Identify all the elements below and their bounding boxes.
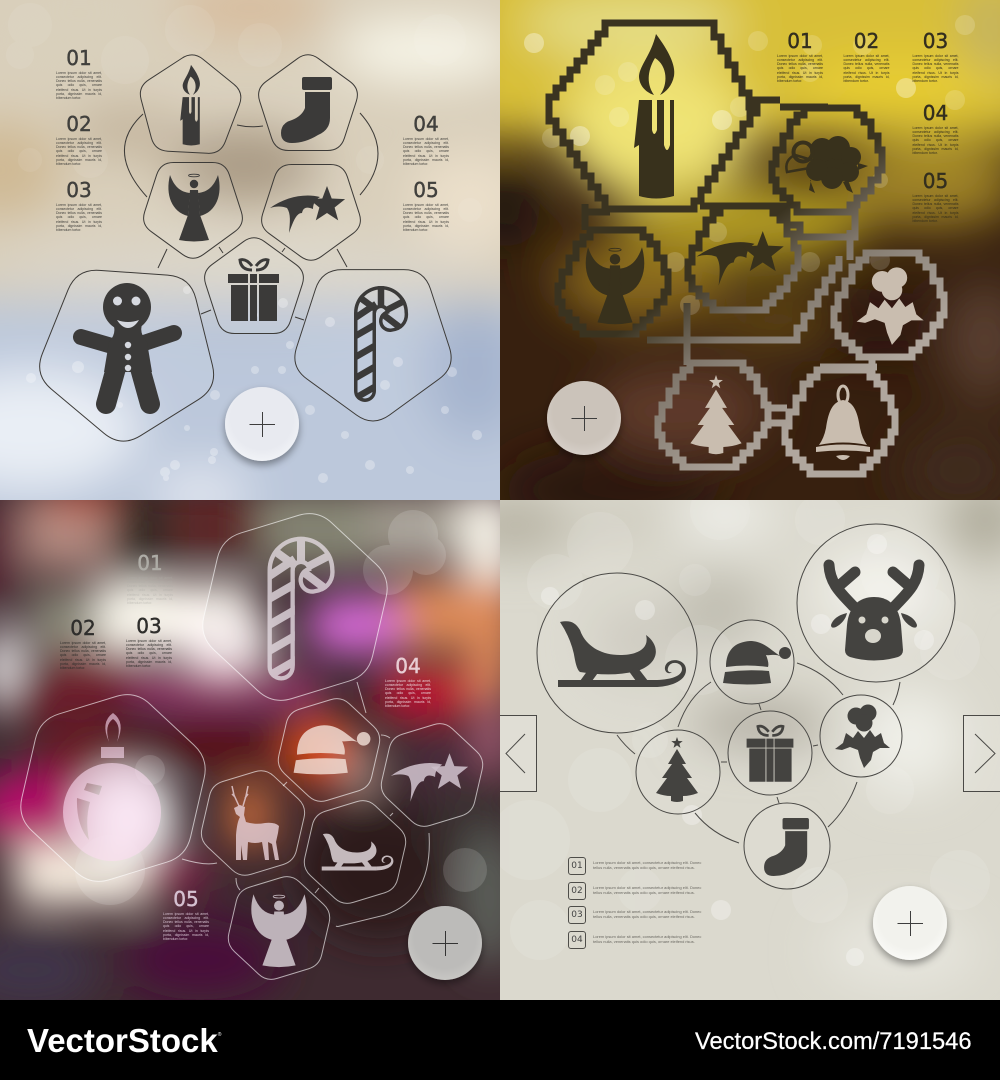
pentagon frames [35, 52, 451, 447]
text block 05: bibendum tortor. [403, 228, 428, 232]
text block 02: consectetur adipiscing elit. [56, 141, 102, 145]
connector lines [182, 682, 429, 926]
text block 04: Lorem ipsum dolor sit amet, [912, 126, 958, 130]
text block 02: Lorem ipsum dolor sit amet, [60, 641, 106, 645]
text block 03: Donec tellus nulla, venenatis [56, 211, 102, 215]
icon: gift box [747, 726, 793, 781]
text block 01: porta, dignissim mauris id, [127, 597, 173, 601]
text block 02: Donec tellus nulla, venenatis [56, 145, 102, 149]
list row 04: tellus nulla, venenatis quis odio quis, ornare eleifend risus. [593, 939, 695, 944]
text block 03: 03 [66, 178, 92, 202]
text block 05: eleifend risus. Ut in turpis [403, 220, 449, 224]
watermark url: VectorStock.com/7191546 [695, 1029, 972, 1055]
text block 03 [56, 178, 102, 232]
icon: candle [180, 65, 200, 145]
text block 02: Lorem ipsum dolor sit amet, [844, 54, 890, 58]
text block 04: consectetur adipiscing elit. [912, 130, 958, 134]
text block 03 [126, 614, 172, 668]
text block 05: quis odio quis, ornare [912, 206, 958, 210]
icon: bauble [63, 713, 161, 861]
text block 01 [777, 29, 823, 83]
text block 05: eleifend risus. Ut in turpis [163, 929, 209, 933]
text block 02 [56, 112, 102, 166]
icon: sleigh [558, 621, 686, 687]
text block 03: consectetur adipiscing elit. [126, 643, 172, 647]
icon: reindeer head [829, 565, 919, 660]
text block 01: consectetur adipiscing elit. [56, 75, 102, 79]
text block 03: bibendum tortor. [56, 228, 81, 232]
list row 01: tellus nulla, venenatis quis odio quis, ornare eleifend risus. [593, 865, 695, 870]
text block 03: consectetur adipiscing elit. [912, 58, 958, 62]
text block 02: 02 [854, 29, 879, 53]
text block 02 [60, 616, 106, 670]
text block 04: Lorem ipsum dolor sit amet, [385, 679, 431, 683]
icon: candy cane [250, 517, 349, 690]
icon: stocking [764, 818, 809, 876]
text block 05: porta, dignissim mauris id, [163, 933, 209, 937]
text block 02: eleifend risus. Ut in turpis [60, 658, 106, 662]
icon: holly [835, 704, 890, 768]
panel: pentagon infographic on beige and blue background [0, 0, 500, 500]
text block 02: porta, dignissim mauris id, [844, 75, 890, 79]
text block 05: bibendum tortor. [163, 937, 188, 941]
text block 04 [385, 654, 431, 708]
text block 02: Lorem ipsum dolor sit amet, [56, 137, 102, 141]
list row 02: tellus nulla, venenatis quis odio quis, ornare eleifend risus. [593, 890, 695, 895]
text block 01: bibendum tortor. [56, 96, 81, 100]
text block 01: porta, dignissim mauris id, [56, 92, 102, 96]
text block 04: consectetur adipiscing elit. [385, 683, 431, 687]
text block 04: 04 [923, 101, 948, 125]
text block 05: Lorem ipsum dolor sit amet, [403, 203, 449, 207]
connector lines [617, 663, 900, 843]
list row 01 [568, 857, 702, 875]
text block 02: bibendum tortor. [60, 666, 85, 670]
text block 05: porta, dignissim mauris id, [403, 224, 449, 228]
text block 01: eleifend risus. Ut in turpis [56, 88, 102, 92]
icon: sleigh [322, 834, 393, 870]
text block 05: Donec tellus nulla, venenatis [403, 211, 449, 215]
text block 03: bibendum tortor. [912, 79, 938, 83]
icon: candy cane [340, 270, 420, 410]
text block 01 [56, 46, 102, 100]
text block 04: bibendum tortor. [912, 151, 938, 155]
text block 03: Donec tellus nulla, venenatis [126, 647, 172, 651]
text block 01: 01 [137, 551, 163, 575]
text block 05: eleifend risus. Ut in turpis [912, 211, 958, 215]
text block 01: eleifend risus. Ut in turpis [777, 71, 823, 75]
hexagon frames [7, 495, 490, 990]
text block 05: quis odio quis, ornare [403, 215, 449, 219]
list row 04: Lorem ipsum dolor sit amet, consectetur adipiscing elit. Donec [593, 934, 701, 939]
icon: candle [634, 34, 674, 198]
text block 01: bibendum tortor. [777, 79, 802, 83]
text block 04: porta, dignissim mauris id, [403, 158, 449, 162]
text block 02: eleifend risus. Ut in turpis [844, 71, 890, 75]
text block 01: bibendum tortor. [127, 601, 152, 605]
text block 03: consectetur adipiscing elit. [56, 207, 102, 211]
text block 02: quis odio quis, ornare [60, 653, 106, 657]
icon: gift box [228, 260, 279, 321]
text block 04: eleifend risus. Ut in turpis [912, 143, 958, 147]
connector lines [124, 113, 378, 320]
text block 02: porta, dignissim mauris id, [56, 158, 102, 162]
artwork: hexagons and icons [0, 500, 500, 1000]
text block 05: porta, dignissim mauris id, [912, 215, 958, 219]
text block 04: quis odio quis, ornare [385, 691, 431, 695]
text block 02: quis odio quis, ornare [844, 66, 890, 70]
text block 02 [844, 29, 890, 83]
list row 02 [568, 882, 702, 900]
pixel connector lines [585, 100, 877, 423]
icon: santa hat [723, 641, 791, 684]
panel: pixel hexagon infographic on gold background [500, 0, 1000, 500]
watermark logo: VectorStock® [27, 1022, 221, 1059]
text block 02: eleifend risus. Ut in turpis [56, 154, 102, 158]
icon: shooting star [391, 753, 468, 802]
text block 02: Donec tellus nulla, venenatis [844, 62, 890, 66]
arrow box: next [964, 716, 1000, 792]
text block 01: Donec tellus nulla, venenatis [127, 584, 173, 588]
text block 04: 04 [395, 654, 421, 678]
text block 05: 05 [173, 887, 199, 911]
text block 04: porta, dignissim mauris id, [912, 147, 958, 151]
text block 03: Lorem ipsum dolor sit amet, [126, 639, 172, 643]
icon: christmas tree [656, 737, 698, 802]
text block 04: bibendum tortor. [403, 162, 428, 166]
text block 05: consectetur adipiscing elit. [912, 198, 958, 202]
footer bar [0, 1000, 1000, 1080]
text block 05: Donec tellus nulla, venenatis [912, 202, 958, 206]
panel: circle infographic on pale bokeh background [500, 500, 1000, 1000]
text block 05: 05 [923, 169, 948, 193]
text block 05: Donec tellus nulla, venenatis [163, 920, 209, 924]
artwork: circles and icons [500, 500, 1000, 1000]
text block 04 [912, 101, 958, 155]
text block 03: quis odio quis, ornare [126, 651, 172, 655]
icon: angel [252, 895, 306, 967]
circle frames [537, 524, 955, 889]
text block 01: Donec tellus nulla, venenatis [56, 79, 102, 83]
text block 05: 05 [413, 178, 439, 202]
icon: shooting star [270, 186, 345, 233]
button: add [225, 387, 299, 461]
text block 03: 03 [923, 29, 948, 53]
list row 03: tellus nulla, venenatis quis odio quis, ornare eleifend risus. [593, 914, 695, 919]
text block 05: consectetur adipiscing elit. [403, 207, 449, 211]
list row 02: Lorem ipsum dolor sit amet, consectetur adipiscing elit. Donec [593, 885, 701, 890]
text block 01: Lorem ipsum dolor sit amet, [777, 54, 823, 58]
text block 01: Lorem ipsum dolor sit amet, [56, 71, 102, 75]
text block 05: bibendum tortor. [912, 219, 938, 223]
background: blurred beige to blue [0, 0, 560, 560]
list row 02: 02 [571, 886, 583, 896]
list row 04: 04 [571, 935, 583, 945]
text block 01: eleifend risus. Ut in turpis [127, 593, 173, 597]
text block 05: quis odio quis, ornare [163, 924, 209, 928]
text block 05: consectetur adipiscing elit. [163, 916, 209, 920]
text block 05 [163, 887, 209, 941]
icon: ram [786, 136, 868, 193]
text block 04: quis odio quis, ornare [403, 149, 449, 153]
text block 03: bibendum tortor. [126, 664, 151, 668]
text block 01 [127, 551, 173, 605]
list row 04 [568, 931, 702, 949]
list row 03: Lorem ipsum dolor sit amet, consectetur adipiscing elit. Donec [593, 909, 701, 914]
artwork: pentagons and icons [0, 0, 500, 500]
text block 04: 04 [413, 112, 439, 136]
text block 02: porta, dignissim mauris id, [60, 662, 106, 666]
icon: shooting star [697, 231, 784, 286]
text block 04: Lorem ipsum dolor sit amet, [403, 137, 449, 141]
icon: angel [168, 174, 220, 242]
button: add [408, 906, 482, 980]
text block 03: Lorem ipsum dolor sit amet, [56, 203, 102, 207]
button: add [873, 886, 947, 960]
icon: christmas tree [690, 375, 742, 454]
text block 05: Lorem ipsum dolor sit amet, [912, 194, 958, 198]
icon: holly [857, 267, 924, 345]
arrow box: previous [500, 716, 536, 792]
text block 04: consectetur adipiscing elit. [403, 141, 449, 145]
text block 05 [403, 178, 449, 232]
panel: hexagon infographic on dark magenta background [0, 500, 500, 1000]
list row 01: 01 [571, 861, 583, 871]
text block 01: quis odio quis, ornare [56, 83, 102, 87]
text block 03: porta, dignissim mauris id, [56, 224, 102, 228]
text block 02: 02 [66, 112, 92, 136]
text block 02: quis odio quis, ornare [56, 149, 102, 153]
text block 04: Donec tellus nulla, venenatis [912, 134, 958, 138]
text block 03: quis odio quis, ornare [56, 215, 102, 219]
text block 01: 01 [787, 29, 813, 53]
text block 02: consectetur adipiscing elit. [60, 645, 106, 649]
text block 04: porta, dignissim mauris id, [385, 700, 431, 704]
pixel frames [549, 23, 944, 474]
text block 01: consectetur adipiscing elit. [777, 58, 823, 62]
text block 05 [912, 169, 958, 223]
list row 03: 03 [571, 910, 583, 920]
button: add [547, 381, 621, 455]
text block 02: 02 [70, 616, 96, 640]
text block 03: eleifend risus. Ut in turpis [56, 220, 102, 224]
text block 03: eleifend risus. Ut in turpis [126, 656, 172, 660]
text block 04 [403, 112, 449, 166]
text block 01: consectetur adipiscing elit. [127, 580, 173, 584]
icon: deer [232, 786, 279, 860]
list row 03 [568, 906, 702, 924]
icon: angel [586, 248, 644, 324]
icon: gingerbread man [81, 283, 174, 404]
text block 02: Donec tellus nulla, venenatis [60, 649, 106, 653]
text block 01: quis odio quis, ornare [127, 588, 173, 592]
text block 04: quis odio quis, ornare [912, 138, 958, 142]
text block 05: Lorem ipsum dolor sit amet, [163, 912, 209, 916]
text block 03: Lorem ipsum dolor sit amet, [912, 54, 958, 58]
text block 02: bibendum tortor. [844, 79, 869, 83]
text block 03: Donec tellus nulla, venenatis [912, 62, 958, 66]
text block 04: bibendum tortor. [385, 704, 410, 708]
text block 03: 03 [136, 614, 162, 638]
text block 04: eleifend risus. Ut in turpis [385, 696, 431, 700]
text block 04: eleifend risus. Ut in turpis [403, 154, 449, 158]
text block 01: porta, dignissim mauris id, [777, 75, 823, 79]
icon: stocking [281, 77, 332, 143]
text block 02: bibendum tortor. [56, 162, 81, 166]
text block 03 [912, 29, 958, 83]
background: blurred magenta, red and cream [0, 483, 520, 1010]
text block 03: porta, dignissim mauris id, [126, 660, 172, 664]
text block 04: Donec tellus nulla, venenatis [403, 145, 449, 149]
text block 02: consectetur adipiscing elit. [844, 58, 890, 62]
text block 01: Donec tellus nulla, venenatis [777, 62, 823, 66]
text block 03: porta, dignissim mauris id, [912, 75, 958, 79]
text block 01: Lorem ipsum dolor sit amet, [127, 576, 173, 580]
artwork: pixel frames and icons [500, 0, 1000, 500]
list row 01: Lorem ipsum dolor sit amet, consectetur adipiscing elit. Donec [593, 860, 701, 865]
text block 01: 01 [66, 46, 92, 70]
text block 01: quis odio quis, ornare [777, 66, 823, 70]
text block 04: Donec tellus nulla, venenatis [385, 687, 431, 691]
text block 03: quis odio quis, ornare [912, 66, 958, 70]
text block 03: eleifend risus. Ut in turpis [912, 71, 958, 75]
background: blurred gold to brown [450, 0, 1000, 530]
icon: bell [816, 386, 870, 460]
icon: santa hat [294, 725, 370, 774]
background: pale bokeh [455, 480, 1000, 1000]
